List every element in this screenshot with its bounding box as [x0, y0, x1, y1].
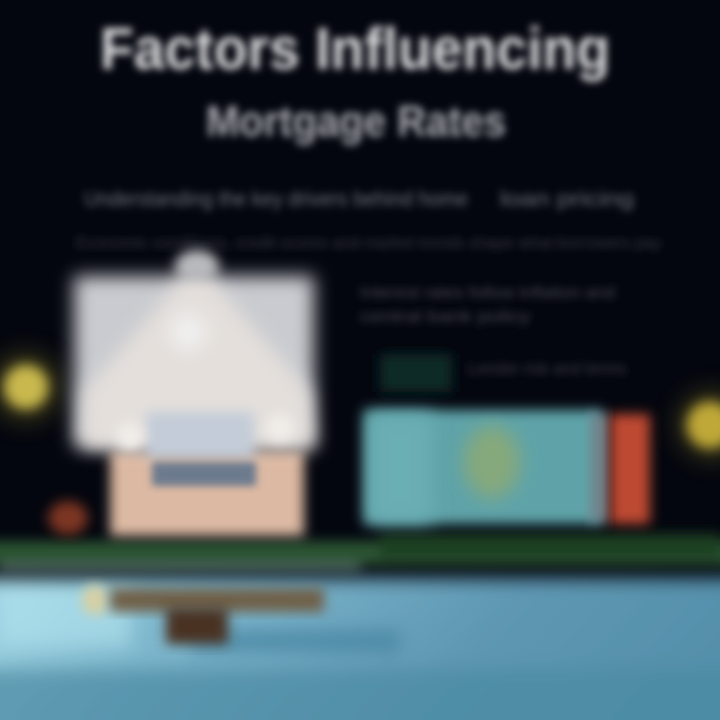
right lamp — [678, 391, 720, 459]
window band — [146, 412, 254, 458]
house sign — [152, 462, 256, 486]
table base — [166, 608, 228, 644]
olive centre accent — [464, 426, 520, 498]
lawn strip — [0, 534, 720, 572]
house wall — [110, 450, 304, 536]
light teal left section — [370, 414, 432, 522]
side text block: central bank policy — [360, 307, 531, 326]
roof peak — [175, 250, 219, 282]
intro text: loan pricing — [500, 188, 634, 211]
pool water — [0, 578, 720, 720]
intro text — [76, 188, 661, 252]
red bar section — [610, 414, 650, 524]
teal bar section — [364, 410, 602, 524]
side text block: Lender risk and terms — [468, 359, 626, 378]
dark green accent — [380, 354, 452, 392]
subtitle: Mortgage Rates — [206, 97, 506, 146]
grey blue transition — [590, 414, 608, 522]
pedestal glow — [82, 585, 108, 615]
house backdrop panel — [74, 276, 314, 446]
intro text: Understanding the key drivers behind home — [84, 188, 468, 211]
house roof — [82, 262, 314, 448]
attic window — [170, 314, 206, 350]
side text block — [360, 283, 626, 378]
title: Factors Influencing — [100, 16, 610, 82]
side text block: Interest rates follow inflation and — [360, 283, 615, 302]
house illustration — [74, 250, 314, 536]
eave highlights — [116, 414, 294, 451]
bar chart panel — [364, 410, 650, 524]
title — [100, 16, 610, 146]
table top — [110, 588, 324, 612]
left lamp — [0, 353, 60, 421]
intro text: Economic conditions, credit scores and market trends shape what borrowers pay — [76, 235, 661, 252]
small red shrub — [48, 501, 88, 535]
wooden table — [82, 585, 324, 644]
